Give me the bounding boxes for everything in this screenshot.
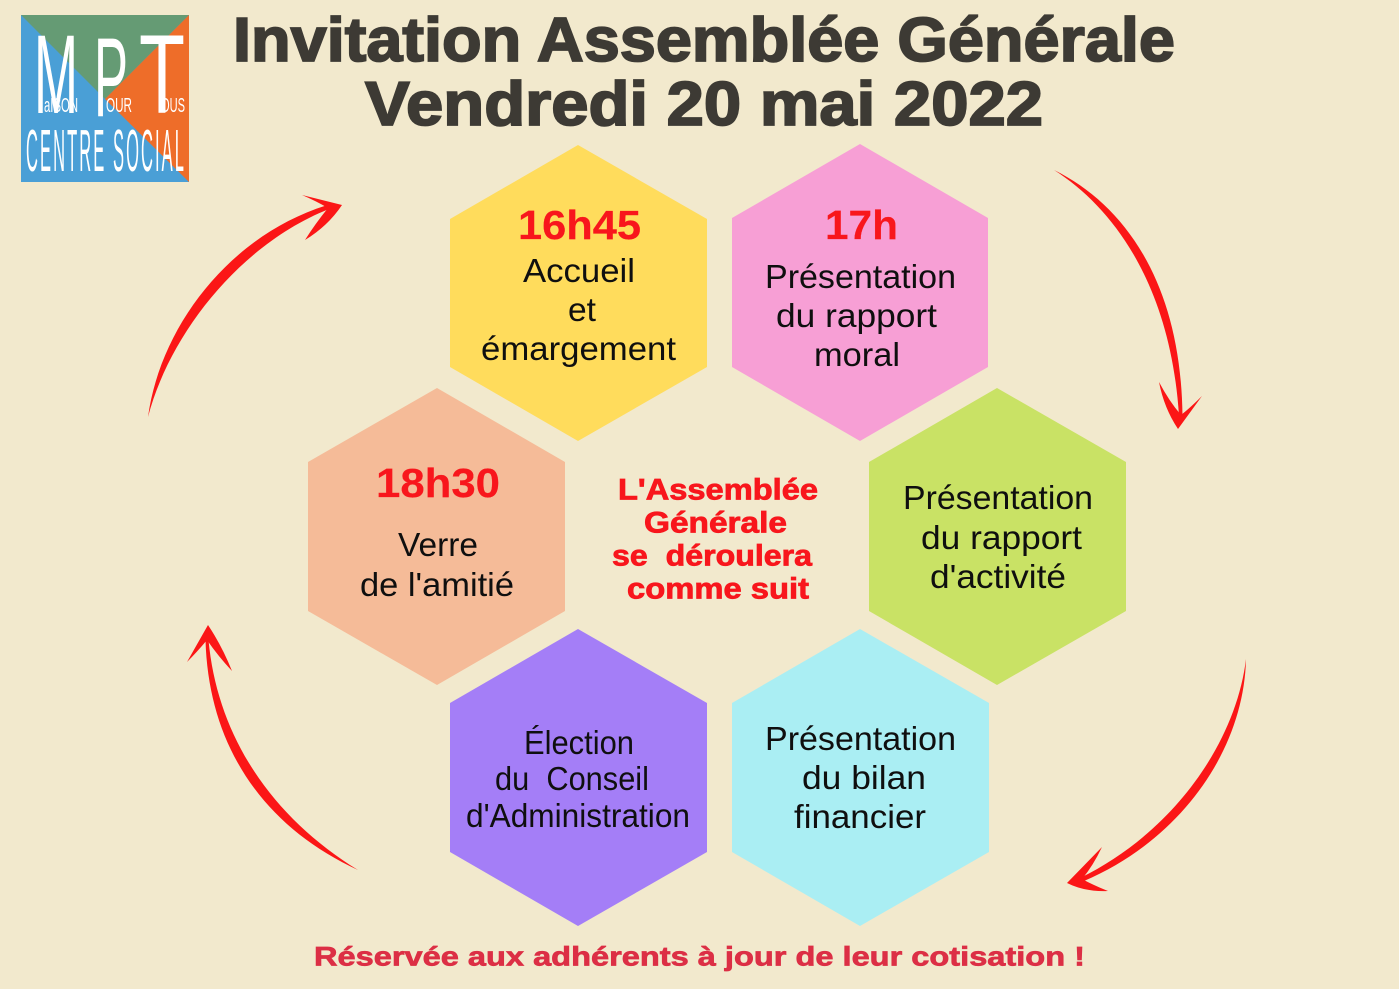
- arrow: top right: [1054, 170, 1202, 429]
- hexagon: 18h30 verre de l'amitié: 18h30: [376, 460, 500, 506]
- hexagon: 18h30 verre de l'amitié: de l'amitié: [360, 566, 514, 603]
- hexagon: 18h30 verre de l'amitié: [308, 388, 565, 685]
- hexagon: rapport d'activité: [869, 388, 1126, 685]
- hexagon: 17h rapport moral: Présentation: [765, 258, 956, 295]
- logo: MPT centre social: [21, 12, 189, 185]
- central message: se déroulera: [612, 540, 812, 572]
- logo: MPT centre social: CENTRE SOCIAL: [26, 119, 184, 185]
- arrow: bottom right: [1067, 659, 1246, 891]
- hexagon: 18h30 verre de l'amitié: Verre: [398, 526, 478, 563]
- logo: MPT centre social: T: [139, 12, 185, 137]
- hexagon: 16h45 accueil: [450, 145, 707, 441]
- hexagon: 17h rapport moral: moral: [814, 336, 900, 373]
- footer note: Réservée aux adhérents à jour de leur cotisation !: [314, 942, 1085, 972]
- hexagon: 16h45 accueil: 16h45: [518, 202, 641, 248]
- hexagon: 16h45 accueil: et: [568, 291, 596, 328]
- hexagon: 17h rapport moral: [732, 144, 988, 441]
- logo: MPT centre social: P: [94, 15, 128, 140]
- hexagon: rapport d'activité: d'activité: [930, 558, 1066, 595]
- hexagon: élection du conseil: d'Administration: [466, 797, 690, 834]
- title: Invitation Assemblée Générale: [233, 6, 1175, 75]
- logo: MPT centre social: aISON: [44, 95, 78, 117]
- hexagon: élection du conseil: du Conseil: [495, 760, 649, 797]
- hexagon: 17h rapport moral: 17h: [825, 202, 898, 248]
- hexagon: bilan financier: du bilan: [802, 759, 926, 796]
- title: Vendredi 20 mai 2022: [365, 70, 1043, 139]
- hexagon: élection du conseil: [450, 629, 707, 926]
- title: [233, 6, 1175, 139]
- hexagon: bilan financier: [732, 629, 989, 926]
- hexagon: rapport d'activité: du rapport: [921, 519, 1082, 556]
- hexagon: 16h45 accueil: Accueil: [523, 252, 635, 289]
- hexagon: 16h45 accueil: émargement: [481, 330, 676, 367]
- logo: MPT centre social: M: [34, 12, 78, 137]
- central message: [612, 474, 818, 606]
- hexagon: 17h rapport moral: du rapport: [776, 297, 937, 334]
- central message: Générale: [644, 506, 787, 540]
- central message: L'Assemblée: [618, 474, 818, 506]
- logo: MPT centre social: OUR: [106, 95, 132, 117]
- hexagon: bilan financier: Présentation: [765, 720, 956, 757]
- hexagon: rapport d'activité: Présentation: [903, 479, 1093, 516]
- hexagon: élection du conseil: Élection: [524, 724, 634, 761]
- arrow: bottom left: [187, 625, 358, 870]
- hexagon: bilan financier: financier: [794, 798, 926, 835]
- arrow: top left: [148, 195, 342, 417]
- central message: comme suit: [627, 572, 809, 606]
- logo: MPT centre social: OUS: [161, 95, 185, 117]
